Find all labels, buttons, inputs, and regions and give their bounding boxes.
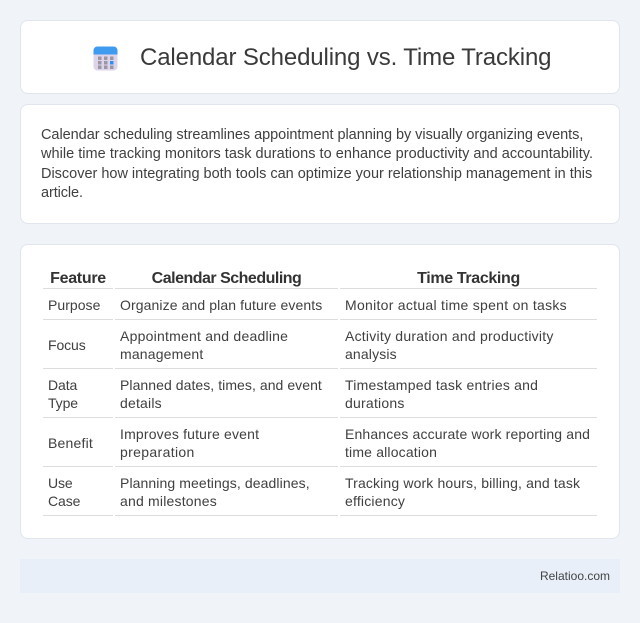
row: focus: Activity duration and productivity — [345, 328, 554, 344]
row: data type — [43, 377, 597, 418]
row: benefit: Improves future event — [120, 426, 259, 442]
row: use case — [43, 475, 597, 516]
row: use case: Tracking work hours, billing, and task — [345, 475, 580, 491]
row: purpose: Organize and plan future events — [120, 297, 322, 313]
row: use case: Use — [48, 475, 73, 491]
row: purpose: Monitor actual time spent on tasks — [345, 297, 567, 313]
intro text: Discover how integrating both tools can optimize your relationship management in this — [41, 166, 592, 182]
intro text: while time tracking monitors task durations to enhance productivity and accountability. — [41, 146, 593, 162]
row: data type: Type — [48, 395, 78, 411]
row: benefit: time allocation — [345, 444, 437, 460]
row: focus: management — [120, 346, 203, 362]
row: benefit: Enhances accurate work reporting and — [345, 426, 590, 442]
table header: Time Tracking — [417, 270, 520, 287]
row: focus: Focus — [48, 337, 86, 353]
row: use case: Case — [48, 493, 80, 509]
title: Calendar Scheduling vs. Time Tracking — [140, 44, 551, 71]
row: benefit: Benefit — [48, 435, 93, 451]
comparison table panel — [20, 244, 620, 539]
row: purpose: Purpose — [48, 297, 100, 313]
row: data type: durations — [345, 395, 405, 411]
row: benefit: preparation — [120, 444, 195, 460]
row: focus — [43, 328, 597, 369]
row: purpose — [43, 297, 597, 320]
intro text: article. — [41, 185, 83, 201]
footer bar — [20, 559, 620, 593]
table header — [43, 270, 597, 289]
row: data type: Data — [48, 377, 77, 393]
row: use case: Planning meetings, deadlines, — [120, 475, 310, 491]
row: data type: Timestamped task entries and — [345, 377, 538, 393]
footer credit: Relatioo.com — [540, 569, 610, 583]
header panel — [20, 20, 620, 94]
row: focus: Appointment and deadline — [120, 328, 288, 344]
row: benefit — [43, 426, 597, 467]
table header: Calendar Scheduling — [152, 270, 301, 287]
table header: Feature — [50, 270, 106, 287]
intro panel — [20, 104, 620, 224]
row: focus: analysis — [345, 346, 397, 362]
intro text: Calendar scheduling streamlines appointment planning by visually organizing events, — [41, 127, 583, 143]
row: data type: details — [120, 395, 162, 411]
row: use case: efficiency — [345, 493, 405, 509]
intro text — [41, 127, 593, 201]
row: use case: and milestones — [120, 493, 217, 509]
icon: calendar — [94, 46, 118, 70]
row: data type: Planned dates, times, and event — [120, 377, 322, 393]
